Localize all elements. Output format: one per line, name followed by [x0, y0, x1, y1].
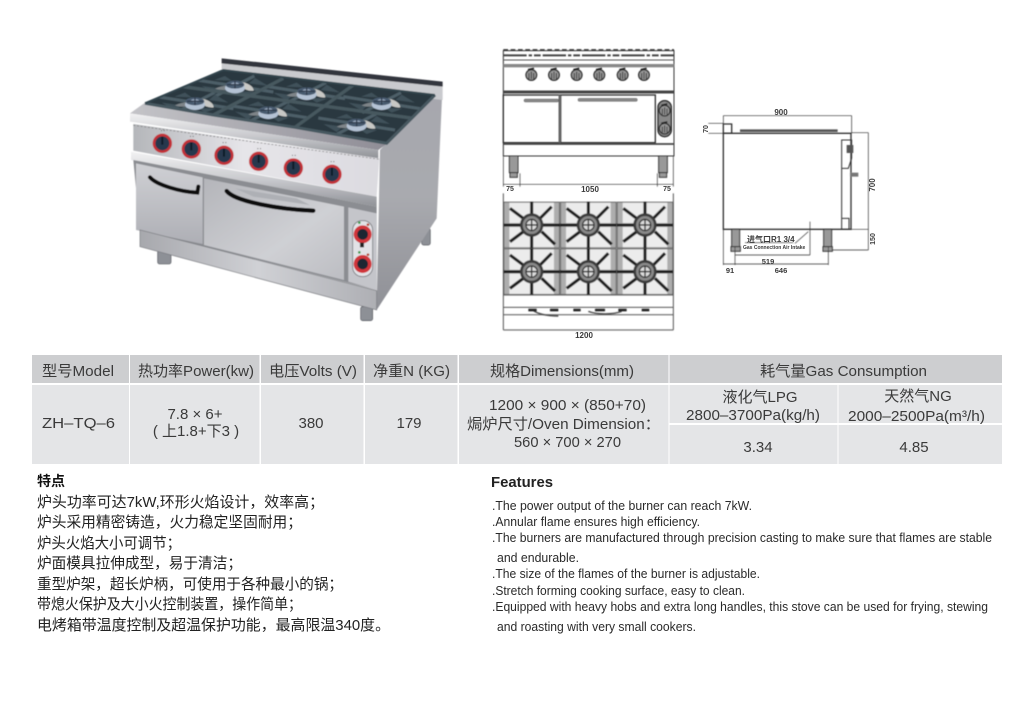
- table body row: 560 × 700 × 270: [514, 434, 621, 451]
- dimension labels: side: 91: [726, 266, 734, 275]
- dimension labels: side: 519: [762, 257, 774, 266]
- English features text block: .The power output of the burner can reach 7kW.: [492, 498, 752, 513]
- Chinese features text block: 炉头功率可达7kW,环形火焰设计，效率高；: [37, 494, 324, 511]
- table body row: 天然气NG: [884, 388, 952, 405]
- Chinese features text block: 电烤箱带温度控制及超温保护功能，最高限温340度。: [37, 617, 390, 634]
- English features text block: and roasting with very small cookers.: [497, 619, 696, 634]
- table body row: 7.8 × 6+: [167, 406, 223, 423]
- oven control dials: [658, 101, 671, 137]
- table header row: 净重N (KG): [373, 363, 450, 380]
- front upper band: [130, 113, 378, 158]
- table header row: 规格Dimensions(mm): [490, 363, 634, 380]
- Chinese features text block: 炉头采用精密铸造，火力稳定坚固耐用；: [37, 514, 302, 531]
- English features text block: .Annular flame ensures high efficiency.: [492, 514, 700, 529]
- table header row: 热功率Power(kw): [138, 363, 254, 380]
- dimension labels: front: [506, 185, 671, 194]
- burner grates: [145, 70, 435, 143]
- dimension labels: side: 70: [703, 125, 710, 133]
- control knobs: [153, 131, 342, 184]
- table header row: 电压Volts (V): [269, 363, 357, 380]
- drawing: front elevation: [503, 50, 674, 187]
- knob row: [526, 68, 649, 80]
- table body row: 3.34: [743, 439, 773, 456]
- right oven door: [204, 178, 344, 280]
- base plinth: [140, 230, 377, 310]
- Chinese features text block: [37, 473, 390, 634]
- table body row: 焗炉尺寸/Oven Dimension：: [467, 416, 660, 433]
- burner grid: [503, 202, 673, 295]
- dimension labels: side: 进气口R1 3/4: [747, 234, 795, 244]
- table header row: [32, 355, 1002, 383]
- English features text block: .The size of the flames of the burner is adjustable.: [492, 566, 760, 581]
- dimension labels: side: Gas Connection Air Intake: [743, 245, 806, 251]
- table body row: ZH–TQ–6: [42, 415, 115, 432]
- table body row: 液化气LPG: [722, 389, 798, 406]
- table body row: 380: [298, 415, 324, 432]
- table body row: 2000–2500Pa(m³/h): [848, 408, 985, 425]
- table body row: ( 上1.8+下3 ): [153, 423, 239, 440]
- table header row: 型号Model: [42, 363, 114, 380]
- table header row: 耗气量Gas Consumption: [760, 363, 927, 380]
- legs: [158, 228, 430, 321]
- left door: [136, 163, 203, 244]
- dimension labels: side: 900: [774, 108, 788, 117]
- lower band: [131, 152, 377, 207]
- English features text block: .Stretch forming cooking surface, easy to clean.: [492, 583, 745, 598]
- dimension labels: side: 700: [868, 178, 877, 192]
- table body row: [32, 385, 1002, 464]
- dimension labels: front: 1050: [581, 185, 599, 194]
- hob deck: [130, 103, 387, 150]
- drawing: top view with six burners: [503, 193, 673, 330]
- English features text block: .The burners are manufactured through precision casting to make sure that flames are stable: [492, 530, 992, 545]
- oven front body: [133, 160, 377, 290]
- English features text block: [491, 475, 992, 634]
- table body row: 2800–3700Pa(kg/h): [686, 407, 820, 424]
- product photo: six-burner gas range with oven: [130, 58, 443, 321]
- Chinese features text block: 带熄火保护及大小火控制装置，操作简单；: [37, 596, 302, 613]
- dimension labels: front: 75: [663, 186, 671, 193]
- specification table: [32, 355, 1002, 464]
- Chinese features text block: 炉面模具拉伸成型，易于清洁；: [37, 555, 242, 572]
- control panel: [133, 124, 379, 197]
- drawing: side elevation: [708, 116, 868, 265]
- Chinese features text block: 炉头火焰大小可调节；: [37, 535, 181, 552]
- heading: 特点: 特点: [37, 473, 65, 489]
- dimension label: 1200: 1200: [575, 331, 593, 340]
- dimension labels: side: [703, 108, 877, 275]
- table body row: 179: [396, 415, 422, 432]
- oven control box: [348, 207, 377, 290]
- Chinese features text block: 重型炉架，超长炉柄，可使用于各种最小的锅；: [37, 576, 343, 593]
- dimension labels: front: 75: [506, 186, 514, 193]
- English features text block: .Equipped with heavy hobs and extra long handles, this stove can be used for frying, stewing: [492, 599, 988, 614]
- table body row: 4.85: [899, 439, 929, 456]
- dimension labels: side: 646: [775, 266, 787, 275]
- heading: Features: Features: [491, 475, 553, 491]
- English features text block: and endurable.: [497, 550, 579, 565]
- dimension labels: side: 150: [870, 233, 877, 245]
- backsplash: [222, 59, 443, 100]
- table body row: 1200 × 900 × (850+70): [489, 397, 646, 414]
- side panel: [377, 83, 443, 310]
